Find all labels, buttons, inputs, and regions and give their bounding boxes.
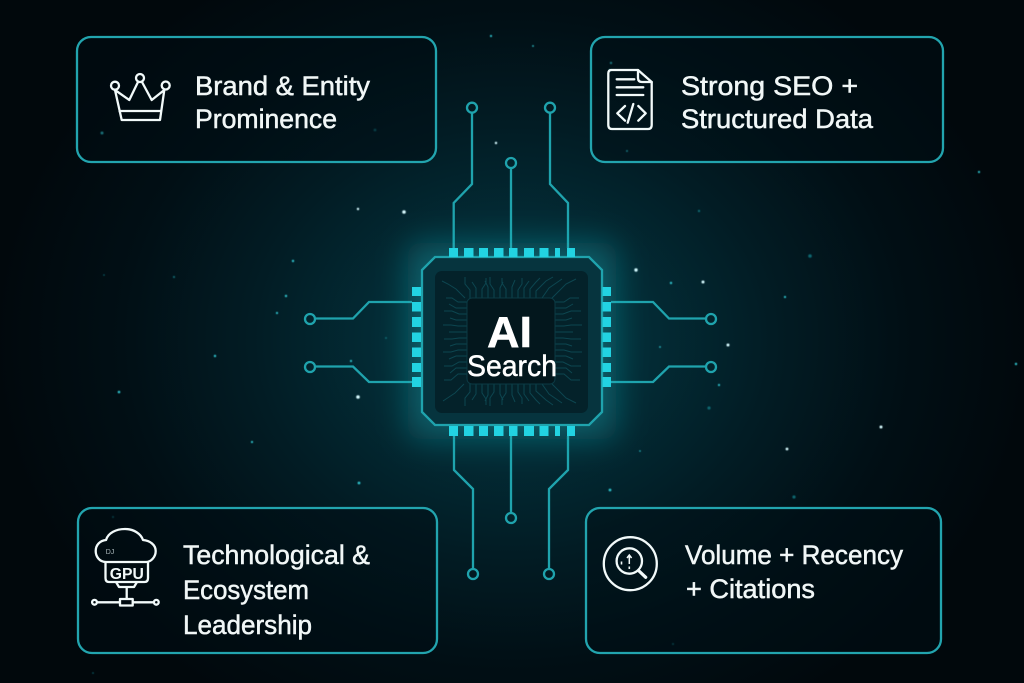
panel: Technological & Ecosystem Leadership (78, 508, 437, 653)
icon: GPU cloud: DJ (106, 549, 114, 556)
central chip: AI Search (408, 243, 616, 439)
heading: Brand & Entity Prominence: Brand & Entity (195, 71, 370, 101)
heading: Technological & Ecosystem Leadership: Technological & (183, 540, 370, 570)
chip label: Search (467, 350, 557, 383)
chip body (422, 257, 602, 425)
icon: crown (111, 74, 170, 120)
icon: magnifier in circle (604, 537, 657, 590)
icon: code document (608, 70, 652, 129)
chip label: AI (487, 308, 532, 357)
heading: Brand & Entity Prominence: Prominence (195, 104, 337, 134)
heading: Strong SEO + Structured Data: Strong SEO + (681, 71, 858, 101)
icon: GPU cloud (92, 529, 159, 606)
circuit traces (305, 103, 716, 579)
chip die (467, 298, 555, 384)
heading: Volume + Recency + Citations: Volume + Recency (685, 540, 903, 570)
panel: Strong SEO + Structured Data (591, 37, 943, 162)
chip micro traces (442, 277, 582, 406)
heading: Technological & Ecosystem Leadership: Ecosystem (183, 575, 309, 605)
icon: GPU cloud: GPU (110, 566, 144, 583)
chip glow (408, 243, 616, 439)
panel: Brand & Entity Prominence (77, 37, 436, 162)
heading: Strong SEO + Structured Data: Structured Data (681, 104, 874, 134)
chip inner panel (435, 271, 588, 413)
heading: Volume + Recency + Citations: + Citations (686, 574, 815, 604)
chip pads (412, 248, 611, 436)
panel: Volume + Recency + Citations (586, 508, 941, 653)
heading: Technological & Ecosystem Leadership: Leadership (183, 610, 312, 640)
